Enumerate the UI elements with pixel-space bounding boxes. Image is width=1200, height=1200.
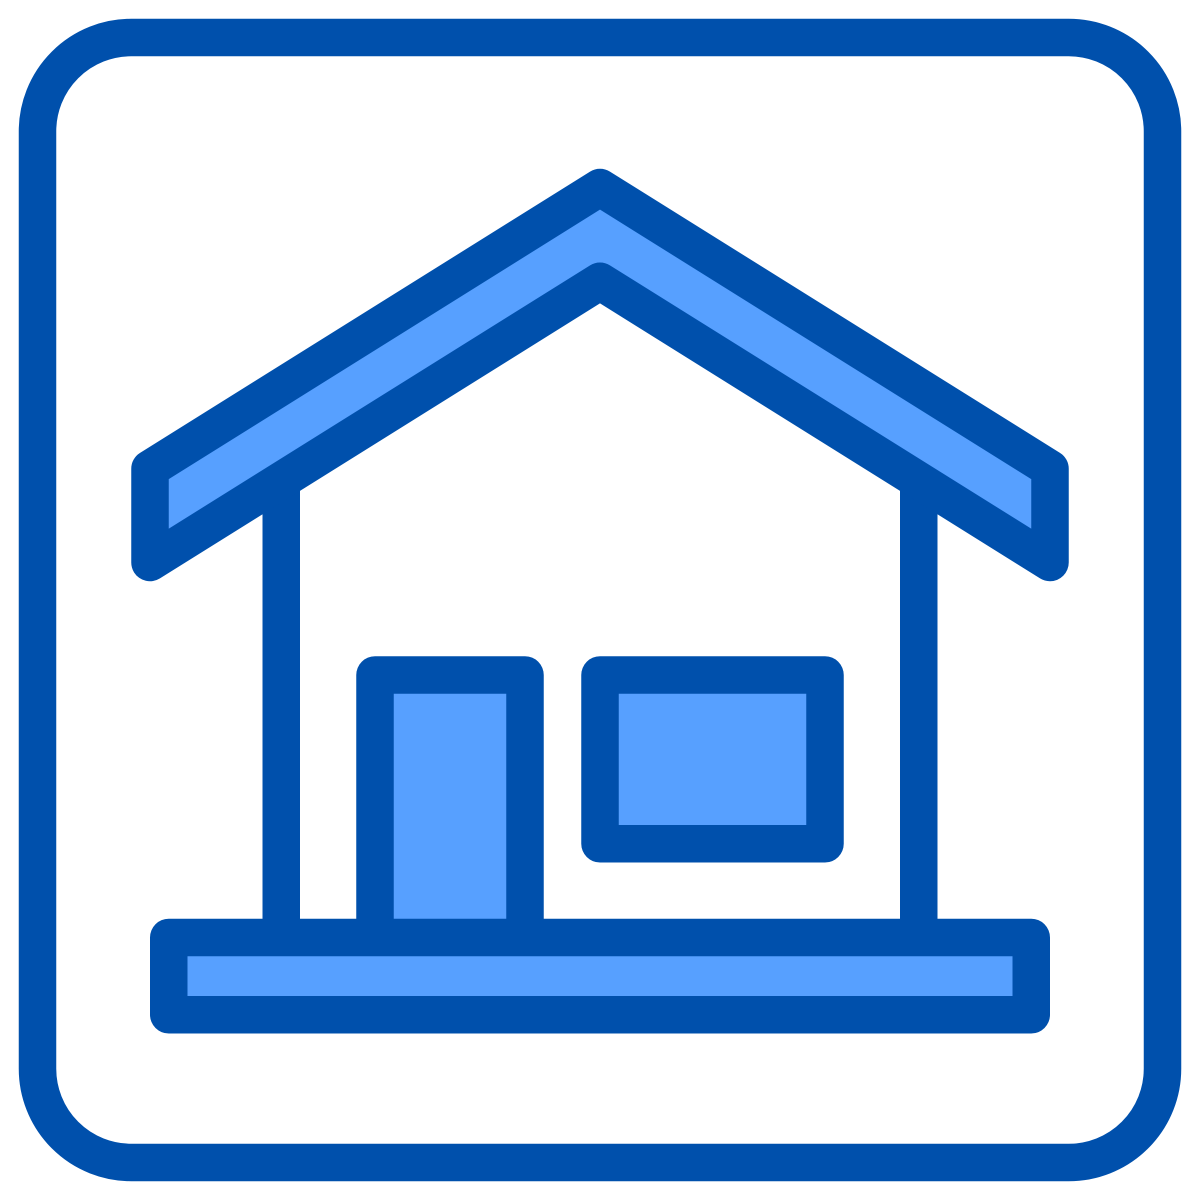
house walls xyxy=(281,480,919,938)
roof xyxy=(150,188,1050,562)
door xyxy=(375,675,525,938)
porch base xyxy=(169,938,1031,1015)
window xyxy=(600,675,825,844)
